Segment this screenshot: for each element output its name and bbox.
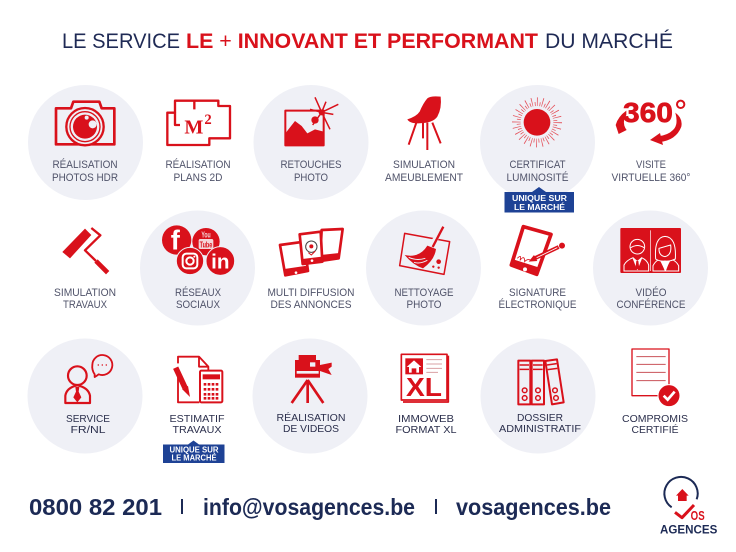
panel: immoweb format XL	[396, 354, 457, 436]
icon: social networks: in	[211, 250, 230, 273]
panel: vidéo conférence	[593, 210, 708, 326]
background circle	[252, 338, 368, 454]
label: DOSSIER	[517, 413, 563, 424]
label: SERVICE	[66, 414, 110, 425]
label: PHOTO	[294, 172, 328, 184]
icon: floor plan	[167, 101, 230, 145]
label: IMMOWEB	[398, 414, 454, 425]
label	[54, 287, 116, 311]
label	[506, 159, 569, 184]
label: FORMAT XL	[396, 425, 457, 436]
label: SOCIAUX	[176, 299, 220, 311]
icon: certified document	[632, 349, 680, 407]
icon: chair	[407, 96, 441, 150]
label: DES ANNONCES	[270, 299, 352, 311]
footer contact line	[29, 494, 611, 520]
title: DU MARCHÉ	[545, 30, 673, 53]
panel: signature électronique	[498, 227, 577, 311]
label: PLANS 2D	[174, 172, 222, 184]
panel: compromis certifié	[622, 349, 688, 436]
label	[268, 287, 354, 311]
label: RÉALISATION	[166, 158, 230, 171]
label: LUMINOSITÉ	[506, 171, 569, 184]
label: ÉLECTRONIQUE	[498, 298, 577, 311]
label	[276, 411, 346, 435]
label: DE VIDEOS	[283, 424, 339, 435]
icon: binders	[518, 359, 564, 404]
icon: sun	[516, 102, 558, 143]
icon: video call	[620, 228, 681, 273]
background circle	[593, 210, 708, 326]
badge: unique sur le marché	[163, 440, 224, 463]
panel: retouches photo	[254, 85, 368, 200]
background circle	[480, 338, 596, 454]
panel: service FR/NL	[28, 338, 142, 454]
label	[394, 287, 454, 311]
label: ESTIMATIF	[170, 414, 224, 425]
label: VIDÉO	[636, 286, 667, 299]
label: VISITE	[636, 159, 666, 171]
label: TRAVAUX	[63, 299, 107, 311]
label: PHOTOS HDR	[52, 172, 118, 184]
badge: unique sur le marché: UNIQUE SUR	[170, 446, 219, 454]
footer contact line: info@vosagences.be	[203, 494, 415, 520]
label	[622, 414, 688, 436]
badge: unique sur le marché: LE MARCHÉ	[514, 203, 566, 212]
label: CERTIFIÉ	[632, 423, 679, 436]
logo: Vos Agences	[660, 477, 717, 537]
title: LE SERVICE	[62, 30, 180, 53]
label	[175, 286, 221, 311]
panel: nettoyage photo	[366, 210, 481, 326]
panel: certificat luminosité	[480, 85, 595, 212]
label: RETOUCHES	[280, 159, 342, 171]
label: RÉALISATION	[276, 411, 346, 424]
logo: Vos Agences: OS	[691, 509, 705, 523]
label: ADMINISTRATIF	[499, 424, 581, 435]
panel: dossier administratif	[480, 338, 596, 454]
footer contact line: 0800 82 201	[29, 494, 162, 520]
label	[612, 159, 690, 184]
icon: document, pencil and calculator	[176, 357, 222, 402]
label	[66, 414, 110, 436]
background circle	[28, 338, 142, 454]
panel: simulation ameublement	[385, 96, 463, 184]
icon: 360 degrees: 360	[623, 97, 673, 128]
panel: réalisation plans 2D	[166, 101, 230, 184]
label: SIGNATURE	[509, 287, 566, 299]
background circle	[480, 85, 595, 200]
label: VIRTUELLE 360°	[612, 172, 690, 184]
label: CERTIFICAT	[510, 159, 566, 171]
logo: Vos Agences: AGENCES	[660, 523, 717, 537]
panel: simulation travaux	[54, 228, 116, 311]
icon: camera	[56, 102, 114, 145]
panel: visite virtuelle 360	[612, 97, 690, 184]
label	[396, 414, 457, 436]
title: LE + INNOVANT ET PERFORMANT	[186, 30, 538, 53]
badge: unique sur le marché: UNIQUE SUR	[512, 194, 567, 203]
label	[499, 413, 581, 435]
label	[385, 159, 463, 184]
label	[616, 286, 686, 311]
label: NETTOYAGE	[394, 287, 454, 299]
icon: tablet and pen	[511, 227, 565, 275]
label: COMPROMIS	[622, 414, 688, 425]
footer contact line: vosagences.be	[456, 494, 611, 520]
label: TRAVAUX	[172, 425, 222, 436]
badge: unique sur le marché: LE MARCHÉ	[172, 454, 217, 462]
label	[498, 287, 577, 311]
background circle	[366, 210, 481, 326]
icon: social networks: You	[201, 229, 211, 239]
panel: réalisation photos HDR	[28, 85, 143, 200]
label: PHOTO	[406, 299, 442, 311]
icon: broom on photo	[400, 227, 450, 274]
icon: floor plan: M	[184, 117, 203, 139]
icon: video camera on tripod	[292, 355, 332, 403]
panel: réalisation de videos	[252, 338, 368, 454]
icon: retouched picture	[285, 97, 338, 145]
panel: multi diffusion des annonces	[268, 229, 354, 311]
label: AMEUBLEMENT	[385, 172, 463, 184]
icon: floor plan: 2	[204, 112, 212, 128]
label	[280, 159, 342, 184]
label: RÉSEAUX	[175, 286, 221, 299]
label: FR/NL	[70, 425, 106, 436]
icon: tablets	[280, 229, 343, 275]
label	[170, 414, 224, 436]
background circle	[140, 210, 255, 326]
label: SIMULATION	[393, 159, 455, 171]
label: CONFÉRENCE	[616, 298, 686, 311]
label: MULTI DIFFUSION	[268, 287, 354, 299]
icon: paint roller	[62, 228, 108, 273]
icon: XL listing: XL	[406, 372, 442, 402]
label: RÉALISATION	[52, 158, 118, 171]
title	[62, 30, 673, 53]
icon: social networks	[162, 224, 235, 275]
label	[166, 158, 230, 184]
icon: person speaking	[65, 355, 112, 403]
background circle	[28, 85, 143, 200]
panel: estimatif travaux	[163, 357, 224, 463]
icon: social networks: Tube	[200, 239, 213, 249]
background circle	[254, 85, 368, 200]
icon: social networks: f	[171, 224, 181, 255]
panel: réseaux sociaux	[140, 210, 255, 326]
badge: unique sur le marché	[504, 187, 574, 212]
label: SIMULATION	[54, 287, 116, 299]
label	[52, 158, 118, 184]
